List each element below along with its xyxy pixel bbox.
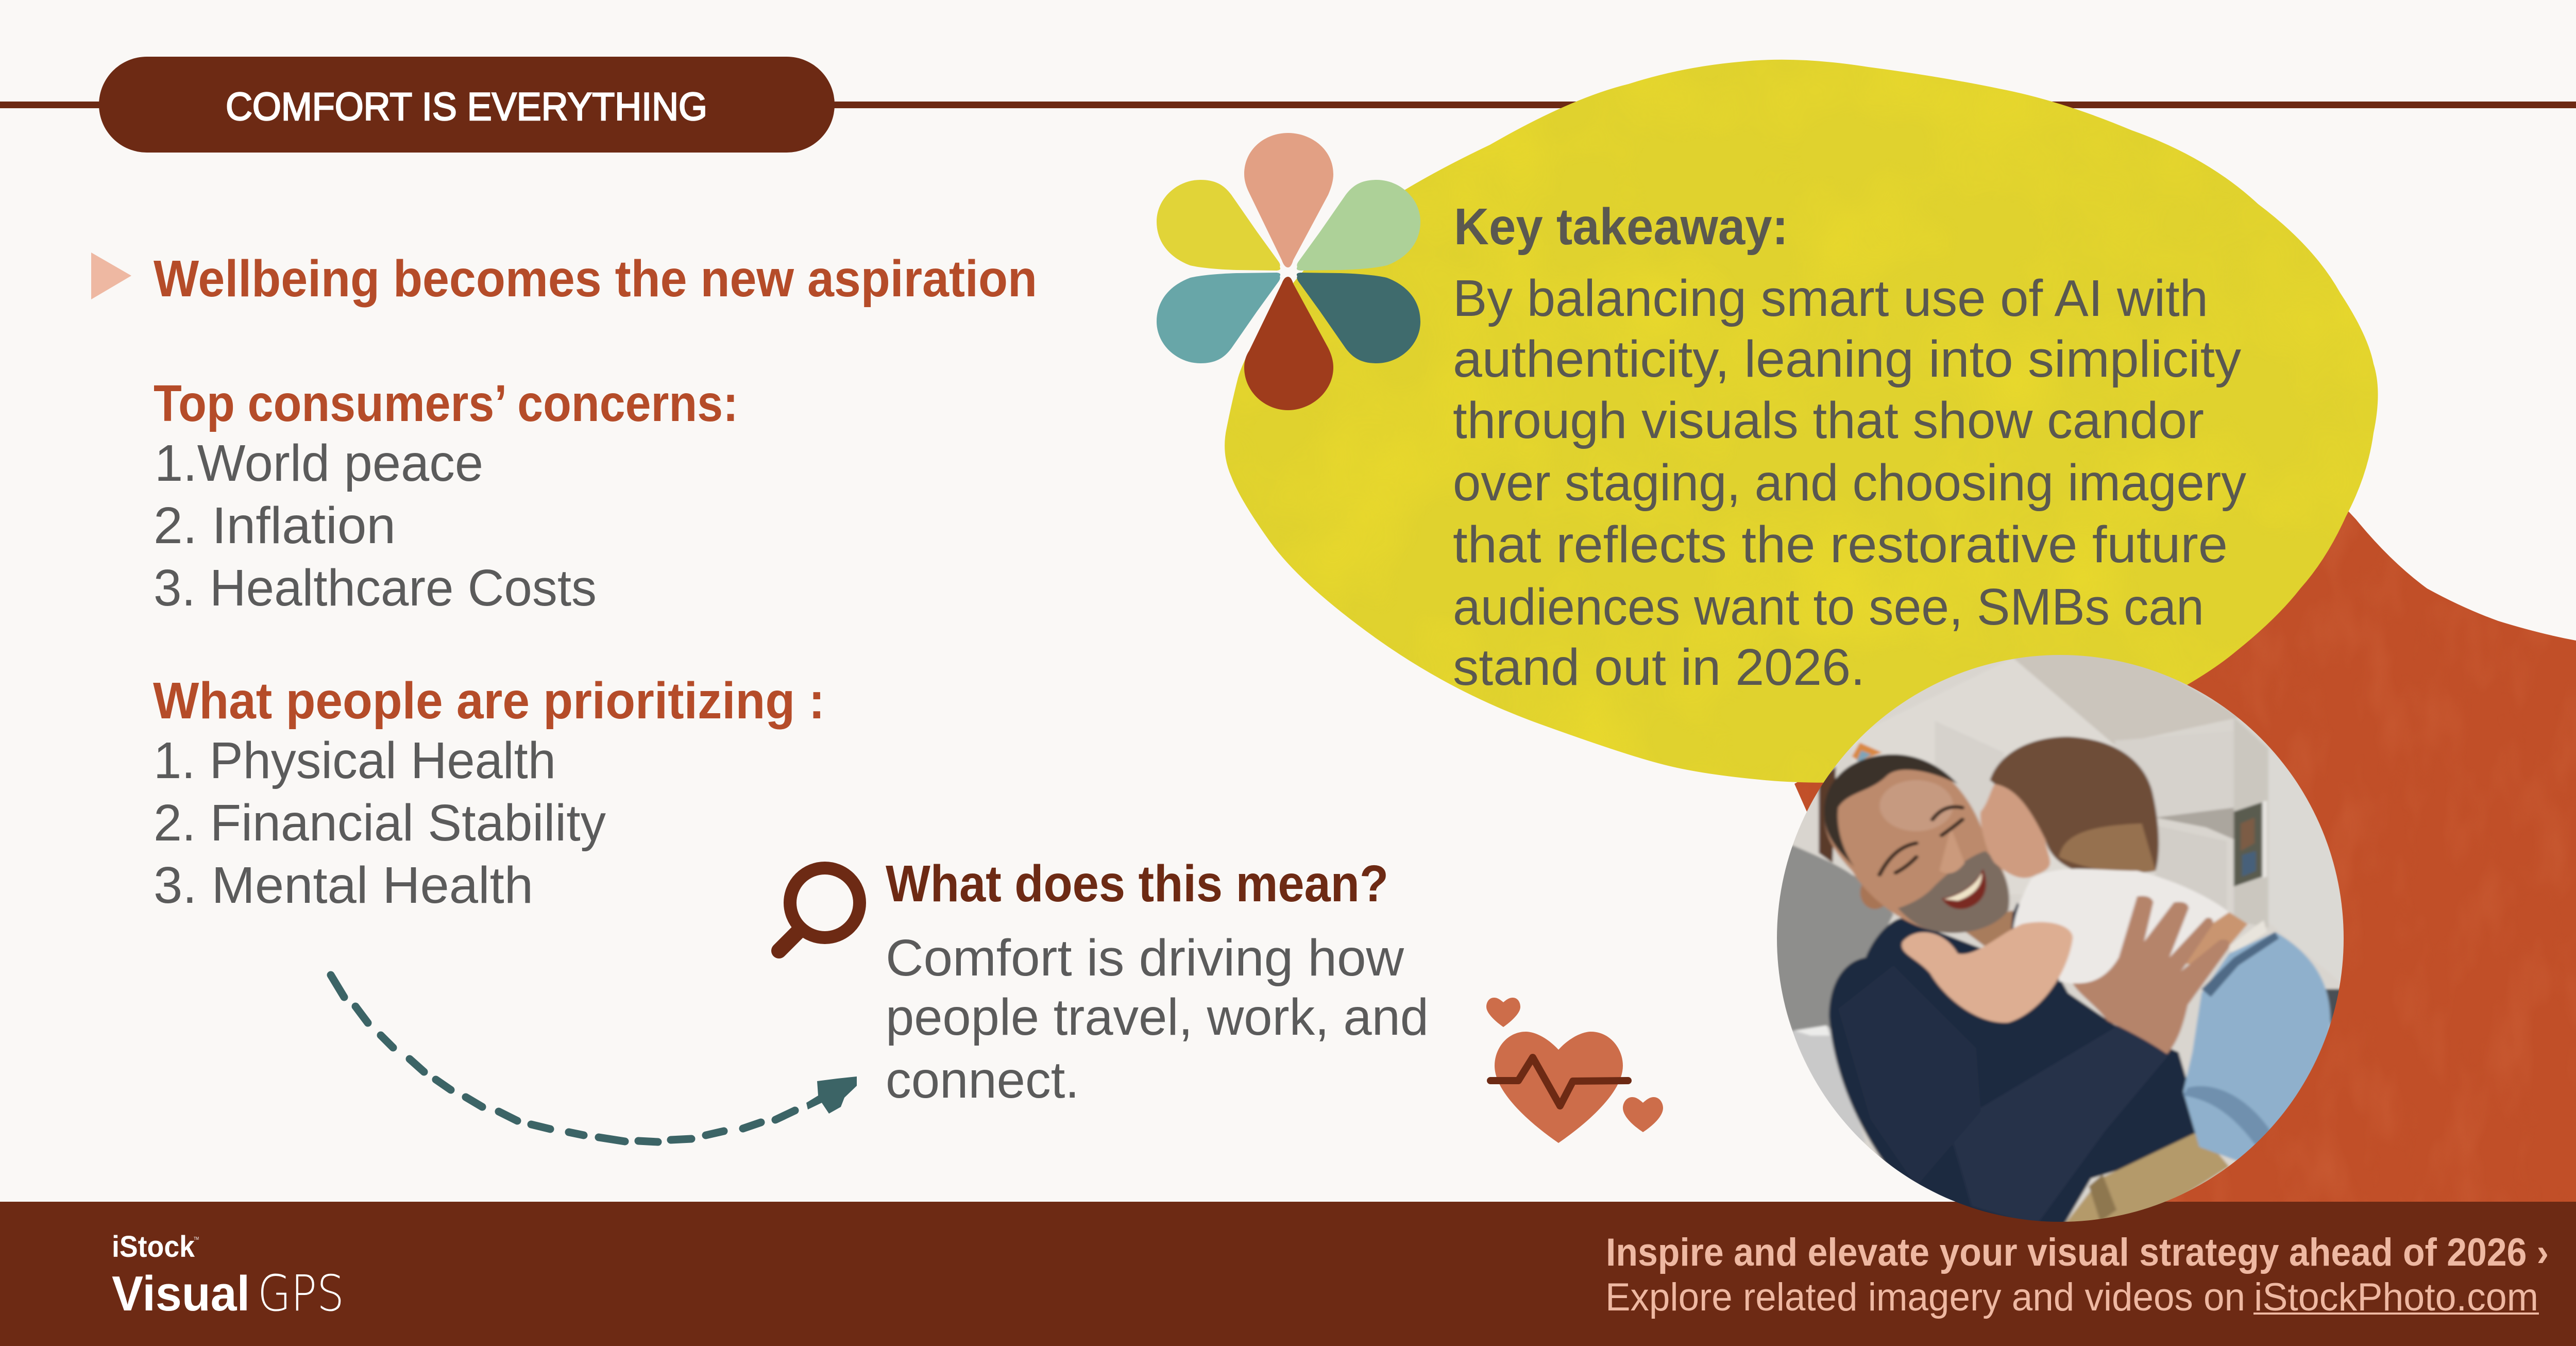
- petal: upper right green: [1297, 180, 1420, 271]
- logo: GPS: GPS: [258, 1265, 344, 1322]
- concerns heading: Top consumers’ concerns:: [154, 375, 738, 432]
- arrow: dashed curve to explanation: [331, 975, 857, 1142]
- section title text: COMFORT IS EVERYTHING: [226, 85, 707, 129]
- concern 3: 3. Healthcare Costs: [154, 559, 597, 617]
- icon: magnifying glass: [779, 868, 859, 951]
- meaning line 3: connect.: [886, 1051, 1079, 1109]
- priority 1: 1. Physical Health: [154, 732, 556, 789]
- logo: Visual: Visual: [112, 1266, 250, 1321]
- flower logo: [1157, 133, 1420, 410]
- triangle bullet: [91, 253, 131, 299]
- takeaway line 6: audiences want to see, SMBs can: [1453, 578, 2204, 636]
- concern 1: 1.World peace: [155, 434, 483, 492]
- block: what does this mean: [886, 855, 1429, 1109]
- meaning line 1: Comfort is driving how: [886, 929, 1404, 987]
- takeaway line 5: that reflects the restorative future: [1453, 516, 2228, 574]
- footer link: iStockPhoto.com: [2254, 1275, 2538, 1319]
- logo: iStock Visual GPS: [112, 1230, 344, 1322]
- takeaway line 3: through visuals that show candor: [1453, 392, 2204, 449]
- block: key takeaway: [1453, 198, 2246, 696]
- footer line 2: Explore related imagery and videos on: [1605, 1275, 2245, 1319]
- petal: lower right dark teal: [1297, 273, 1420, 363]
- yellow key takeaway blob: [1225, 60, 2378, 783]
- takeaway line 1: By balancing smart use of AI with: [1453, 270, 2208, 327]
- footer bar: [0, 1202, 2576, 1346]
- petal: lower left teal: [1157, 273, 1280, 363]
- orange background blob: [1794, 479, 2576, 1202]
- heading: wellbeing: Wellbeing becomes the new aspiration: [154, 250, 1037, 308]
- photo: father and child: [1777, 655, 2344, 1222]
- priorities heading: What people are prioritizing :: [153, 672, 825, 730]
- icon: hearts with pulse: [1486, 998, 1663, 1143]
- section title pill: [99, 57, 835, 153]
- logo: iStock: iStock: [112, 1230, 195, 1264]
- takeaway line 2: authenticity, leaning into simplicity: [1453, 330, 2241, 388]
- header rule: [0, 102, 2576, 108]
- footer link underline: [2253, 1313, 2539, 1315]
- footer call to action: [1605, 1231, 2549, 1319]
- petal: bottom rust: [1244, 277, 1333, 410]
- takeaway line 7: stand out in 2026.: [1453, 638, 1865, 696]
- key takeaway heading: Key takeaway:: [1454, 198, 1788, 256]
- petal: upper left yellow: [1157, 180, 1280, 271]
- priority 3: 3. Mental Health: [154, 856, 533, 914]
- meaning line 2: people travel, work, and: [886, 988, 1429, 1046]
- block: top consumers concerns: [154, 375, 738, 617]
- takeaway line 4: over staging, and choosing imagery: [1453, 454, 2246, 512]
- concern 2: 2. Inflation: [154, 497, 396, 554]
- petal: top salmon: [1244, 133, 1333, 267]
- meaning heading: What does this mean?: [886, 855, 1388, 913]
- logo: trademark: TM: [194, 1236, 199, 1241]
- priority 2: 2. Financial Stability: [154, 794, 606, 852]
- block: what people are prioritizing: [153, 672, 825, 914]
